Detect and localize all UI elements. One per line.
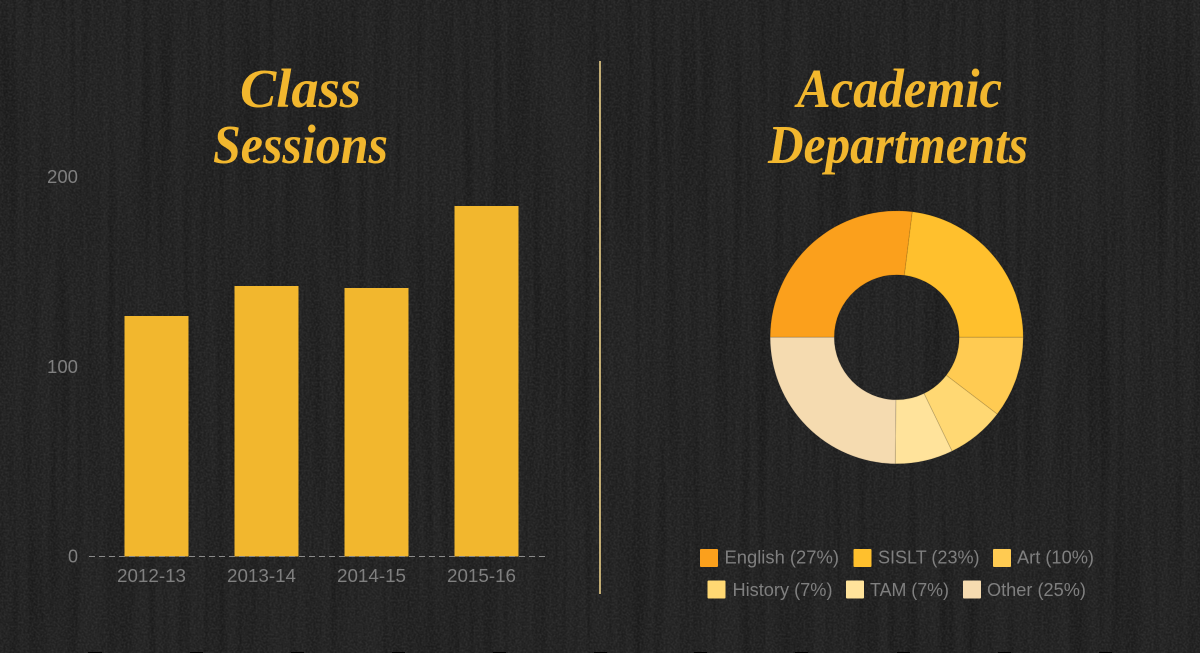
legend item: SISLT: SISLT (23%) [878,548,980,568]
x axis labels: 2014-15 [337,566,406,586]
x axis labels [117,566,516,586]
legend item: Other: Other (25%) [987,580,1086,600]
slice: Art [946,337,1023,414]
legend item: History: History (7%) [732,580,832,600]
legend [700,548,1094,600]
x axis line [89,556,546,558]
divider [599,61,601,594]
slice: SISLT [904,212,1023,337]
bars [124,206,518,556]
title: Class Sessions: Class [240,58,361,119]
y axis labels [47,167,78,566]
y axis labels: 200 [47,167,78,187]
slice: Other [770,337,896,464]
y axis labels: 100 [47,357,78,377]
x axis labels: 2015-16 [447,566,516,586]
legend item: English: English (27%) [724,548,839,568]
title: Academic Departments: Departments [767,114,1028,175]
slice: History [924,375,997,451]
slice: TAM [895,394,952,464]
bar chart: class sessions [47,167,546,586]
legend item: TAM: TAM (7%) [870,580,949,600]
title: Class Sessions: Sessions [213,114,388,175]
x axis labels: 2012-13 [117,566,186,586]
donut chart: departments [770,211,1023,464]
title: Academic Departments: Academic [794,58,1002,119]
legend item: Art: Art (10%) [1017,548,1094,568]
x axis labels: 2013-14 [227,566,296,586]
title: Class Sessions [213,58,388,175]
slice: English [770,211,912,337]
title: Academic Departments [767,58,1028,175]
y axis labels: 0 [68,546,78,566]
